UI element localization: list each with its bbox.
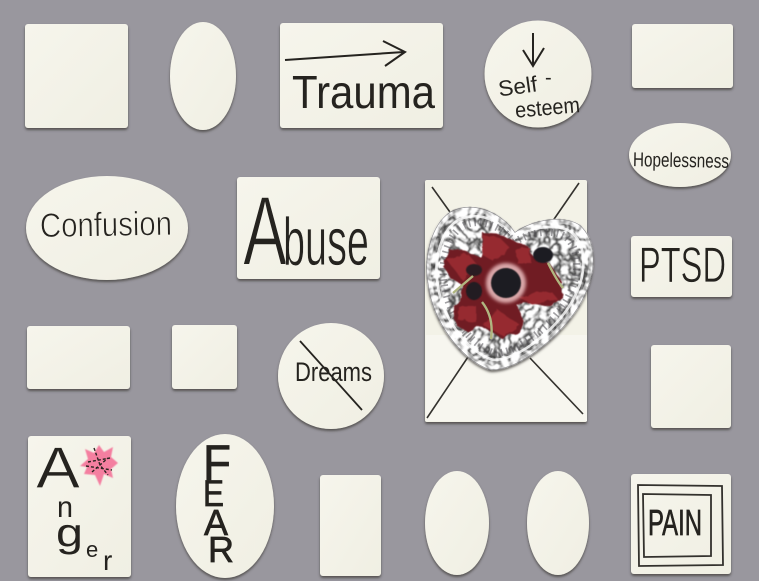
tile: FEAR: F (203, 435, 231, 491)
tile: Anger with pink flower: n (57, 491, 73, 524)
seed heads and stems (453, 247, 563, 339)
blank oval tile (527, 471, 589, 575)
tile: PAIN with hand-drawn frames (631, 474, 731, 574)
blank tall rectangle tile (320, 475, 381, 576)
envelope with crystal heart dish (425, 180, 593, 422)
tile: Hopelessness (629, 123, 731, 187)
tile: Hopelessness: Hopelessness (633, 149, 729, 173)
blank square tile (25, 24, 128, 128)
tile: Anger with pink flower: g (56, 511, 83, 555)
blank oval tile (425, 471, 489, 575)
tile: PAIN with hand-drawn frames: PAIN (648, 502, 702, 543)
icon: pink flower (80, 445, 118, 486)
blank small square tile (172, 325, 237, 389)
tile: Self-esteem with down arrow (484, 20, 592, 128)
blank rectangle tile (632, 24, 733, 88)
tile: Anger with pink flower: r (103, 545, 112, 576)
dried red flower (443, 233, 563, 338)
tile: FEAR (176, 434, 274, 578)
tile: Dreams crossed out: Dreams (295, 357, 372, 387)
blank rectangle tile (27, 326, 130, 389)
tile: FEAR: R (208, 529, 234, 570)
tile: Abuse: buse (283, 204, 369, 280)
tile: Anger with pink flower (28, 436, 131, 577)
tile: PTSD (631, 236, 732, 297)
blank square tile (651, 345, 731, 428)
tile: Confusion: Confusion (40, 205, 172, 245)
icon: glass heart dish with dried flower (426, 207, 593, 370)
tile: Self-esteem with down arrow: esteem (514, 92, 581, 123)
tile: FEAR: E (203, 473, 224, 514)
tile: FEAR: A (204, 502, 228, 543)
tile: Trauma with arrow (280, 23, 443, 128)
tile: Abuse (237, 176, 380, 286)
tile: Dreams crossed out (278, 323, 384, 429)
tile: Self-esteem with down arrow: Self (497, 71, 540, 102)
tile: Confusion (26, 176, 188, 280)
tile: Anger with pink flower: e (86, 537, 98, 562)
flower centre (486, 263, 526, 303)
tile: Abuse: A (243, 176, 287, 286)
tile: Anger with pink flower: A (36, 436, 80, 501)
blank oval tile (170, 22, 236, 130)
tile: Self-esteem with down arrow: - (545, 67, 552, 89)
tile: Trauma with arrow: Trauma (292, 66, 435, 118)
